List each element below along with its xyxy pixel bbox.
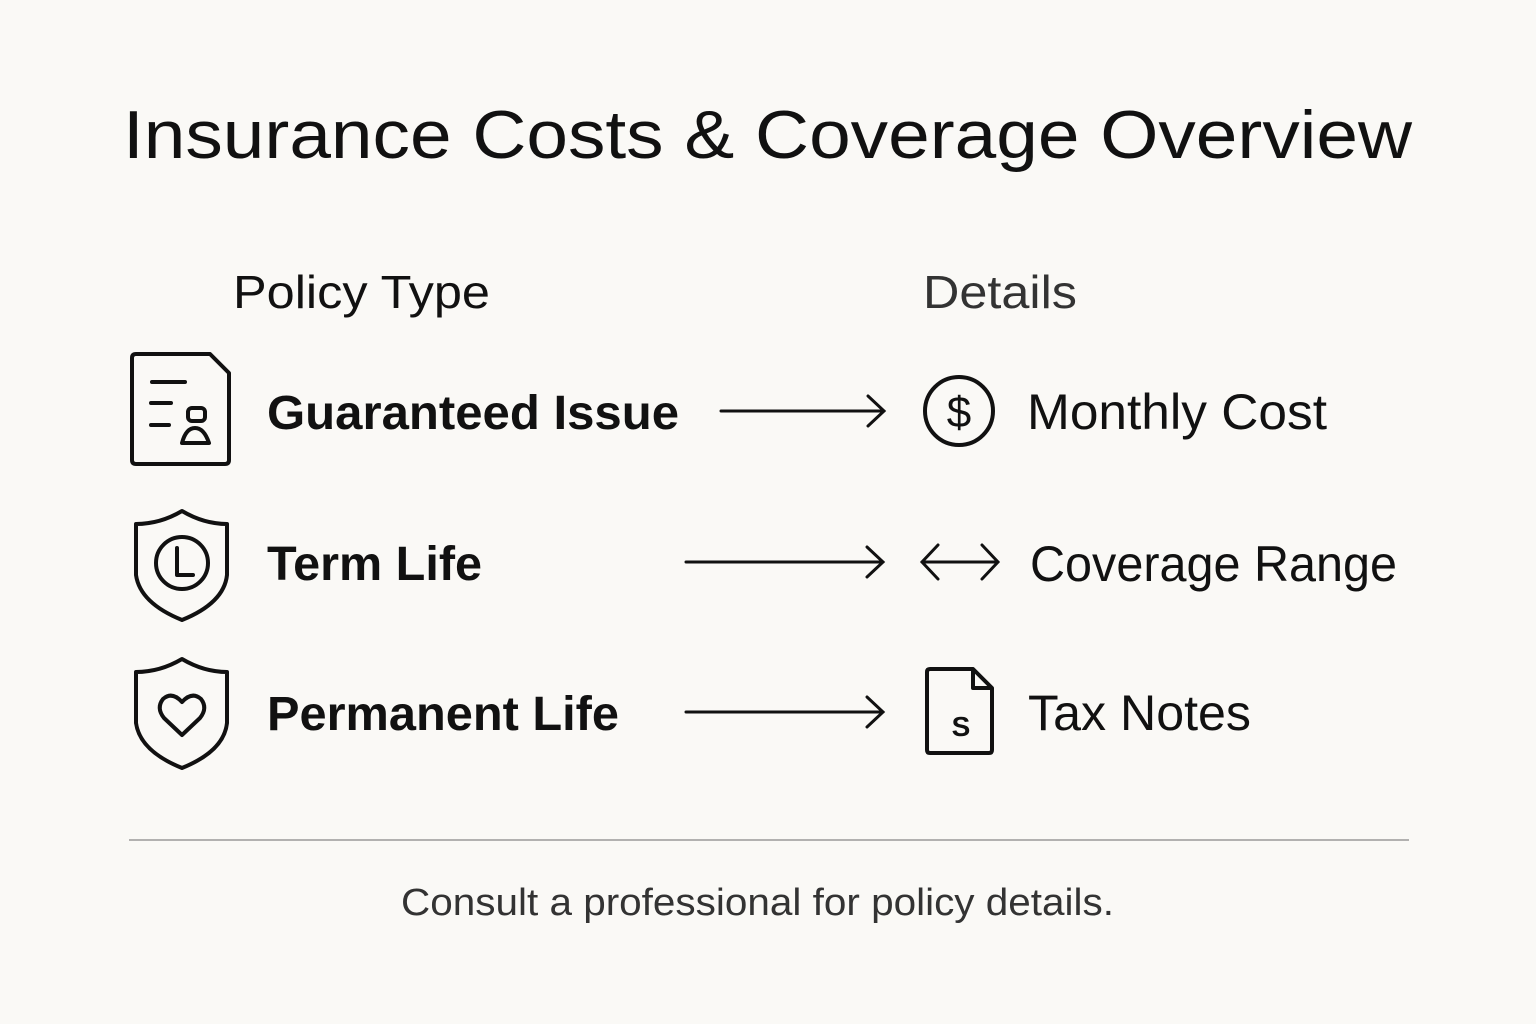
icon: document with person — [132, 354, 229, 464]
arrow — [686, 697, 883, 727]
row: permanent life — [136, 659, 1251, 768]
title: Insurance Costs & Coverage Overview — [123, 97, 1413, 173]
icon: dollar circle — [925, 377, 993, 445]
icon: tax document: S — [952, 711, 970, 742]
column heading: details: Details — [923, 266, 1077, 318]
icon: tax document — [927, 669, 992, 753]
column heading: policy type: Policy Type — [233, 266, 490, 318]
row: term life — [136, 511, 1397, 620]
detail: coverage range: Coverage Range — [1030, 536, 1397, 592]
detail: monthly cost: Monthly Cost — [1027, 384, 1327, 440]
icon: dollar circle: $ — [947, 388, 971, 437]
icon: shield with heart — [136, 659, 227, 768]
label: permanent life: Permanent Life — [267, 688, 619, 741]
icon: double arrow — [922, 545, 998, 579]
label: term life: Term Life — [267, 538, 482, 591]
detail: tax notes: Tax Notes — [1028, 685, 1251, 741]
footer note: Consult a professional for policy details. — [401, 882, 1114, 924]
icon: shield with clock — [136, 511, 227, 620]
arrow — [686, 547, 883, 577]
row: guaranteed issue — [132, 354, 1327, 464]
label: guaranteed issue: Guaranteed Issue — [267, 387, 679, 440]
arrow — [721, 396, 884, 426]
